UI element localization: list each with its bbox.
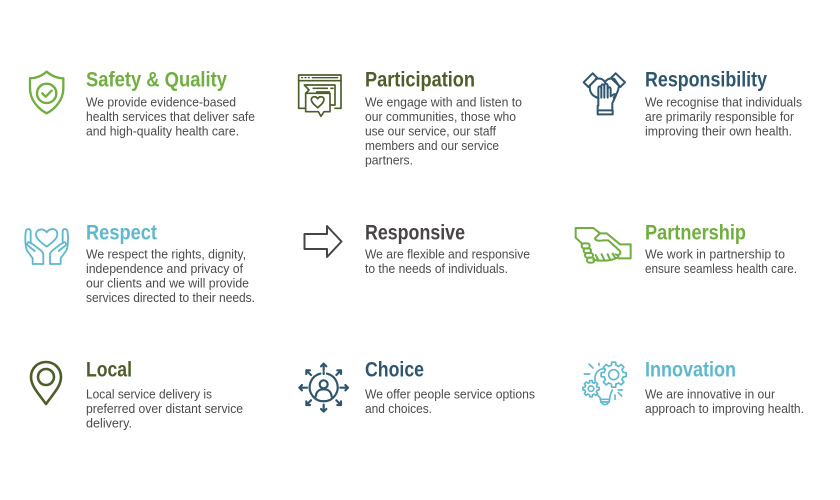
icon: location pin [31, 362, 61, 404]
text: respect: independence and privacy of [86, 262, 243, 276]
text: respect: We respect the rights, dignity, [86, 248, 246, 262]
panel: responsibility [584, 68, 802, 138]
heading: partnership: Partnership [645, 222, 746, 244]
icon: joined hands [584, 73, 625, 114]
heading: local: Local [86, 358, 132, 382]
heading: choice: Choice [365, 358, 424, 382]
icon: right arrow [304, 226, 342, 257]
text: respect [86, 248, 255, 305]
text: innovation: approach to improving health. [645, 402, 804, 416]
text: participation: our communities, those who [365, 110, 516, 124]
text: partnership: ensure seamless health care. [645, 262, 797, 276]
panel: respect [25, 222, 255, 305]
text: participation: members and our service [365, 139, 499, 153]
icon: person with radiating arrows [299, 364, 348, 412]
text: local: preferred over distant service [86, 402, 243, 416]
text: respect: our clients and we will provide [86, 276, 249, 290]
text: responsibility: are primarily responsible for [645, 110, 794, 124]
text: choice [365, 388, 535, 416]
panel: innovation [583, 358, 804, 416]
heading: respect: Respect [86, 222, 157, 244]
heading: responsive: Responsive [365, 222, 465, 244]
panel: responsive [304, 222, 530, 276]
icon: light bulb with gears [583, 362, 626, 404]
text: responsive: to the needs of individuals. [365, 262, 508, 276]
text: responsive: We are flexible and responsive [365, 248, 530, 262]
text: partnership: We work in partnership to [645, 248, 785, 262]
text: local: delivery. [86, 416, 132, 430]
text: respect: services directed to their needs. [86, 291, 255, 305]
panel: local [31, 358, 243, 430]
text: partnership [645, 248, 797, 276]
panel: safety and quality [30, 68, 255, 138]
text: safety and quality [86, 96, 255, 138]
icon: window with speech bubbles [299, 75, 341, 116]
text: participation: use our service, our staff [365, 124, 496, 138]
heading: responsibility: Responsibility [645, 68, 767, 92]
heading: participation: Participation [365, 68, 475, 92]
icon: shield with check [30, 72, 63, 113]
text: safety and quality: We provide evidence-based [86, 96, 236, 110]
text: innovation [645, 388, 804, 416]
text: safety and quality: health services that deliver safe [86, 110, 255, 124]
text: responsibility: improving their own health. [645, 124, 792, 138]
icon: hands holding heart [25, 229, 68, 264]
text: choice: and choices. [365, 402, 432, 416]
heading: innovation: Innovation [645, 358, 736, 382]
heading: safety and quality: Safety & Quality [86, 68, 227, 92]
text: local: Local service delivery is [86, 388, 212, 402]
text: participation: partners. [365, 154, 413, 168]
text: participation: We engage with and listen to [365, 96, 522, 110]
text: innovation: We are innovative in our [645, 388, 775, 402]
text: responsive [365, 248, 530, 276]
text: choice: We offer people service options [365, 388, 535, 402]
text: responsibility: We recognise that individuals [645, 96, 802, 110]
text: participation [365, 96, 522, 168]
panel: choice [299, 358, 535, 416]
icon: handshake [576, 228, 631, 263]
text: responsibility [645, 96, 802, 138]
text: local [86, 388, 243, 430]
panel: participation [299, 68, 522, 168]
text: safety and quality: and high-quality health care. [86, 124, 239, 138]
panel: partnership [576, 222, 797, 276]
